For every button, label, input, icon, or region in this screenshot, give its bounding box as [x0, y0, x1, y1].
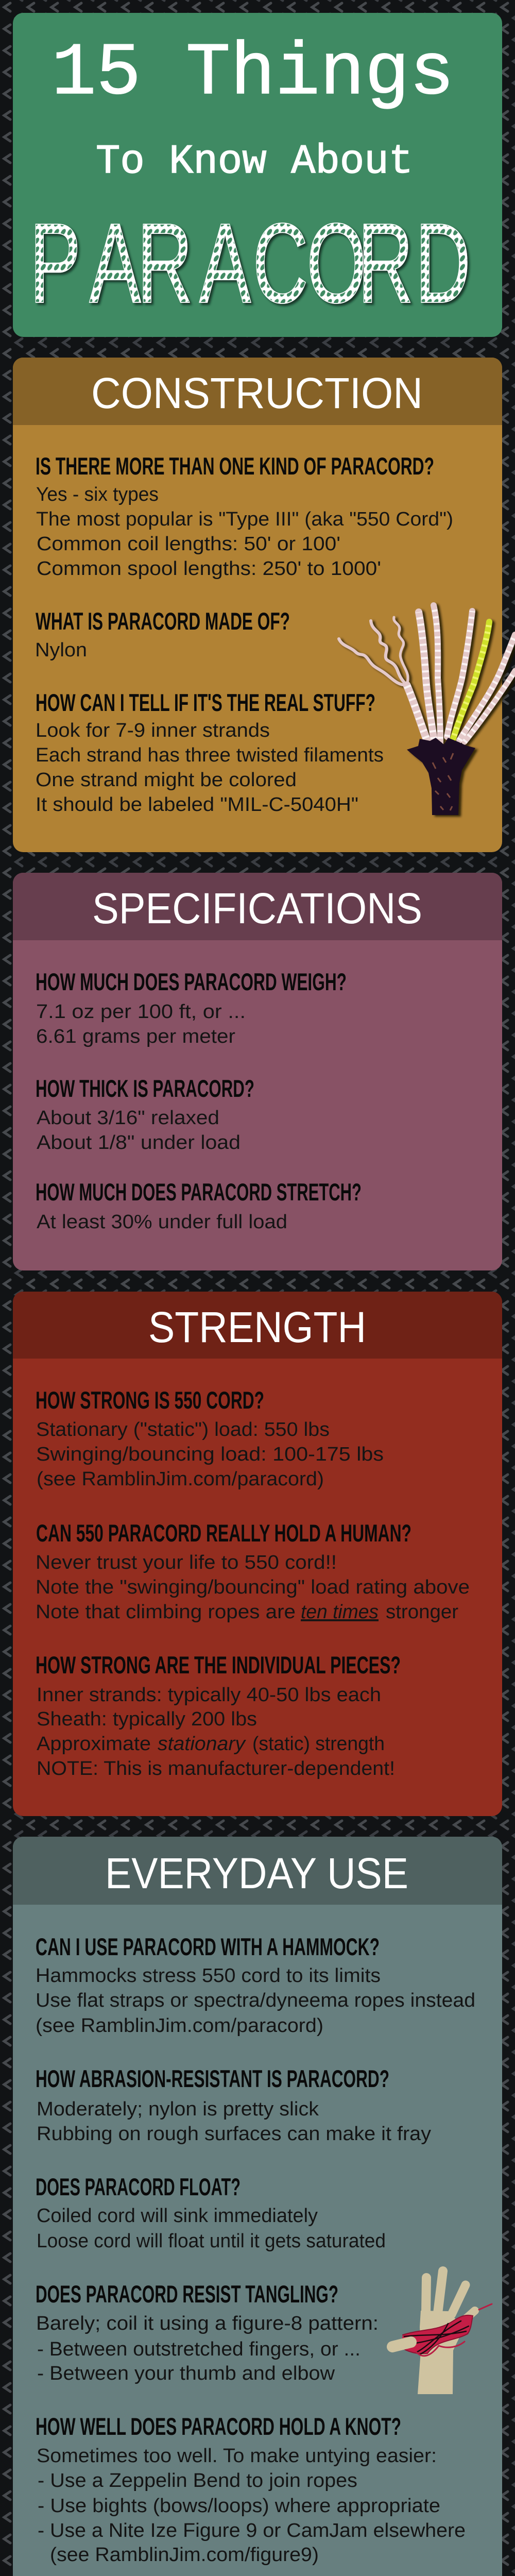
- question: what it is made of: [35, 607, 290, 661]
- question: stretch: [36, 1178, 362, 1233]
- question: how strong: (see RamblinJim.com/paracord): [37, 1468, 324, 1490]
- question: abrasion: Rubbing on rough surfaces can make it fray: [37, 2123, 431, 2145]
- question: weight: [36, 968, 347, 1047]
- question: real stuff: Each strand has three twisted filaments: [36, 744, 384, 766]
- question: thickness: HOW THICK IS PARACORD?: [36, 1075, 254, 1102]
- question: kinds of paracord: Yes - six types: [36, 484, 159, 505]
- question: hammock: [36, 1933, 475, 2037]
- question: tangling: DOES PARACORD RESIST TANGLING?: [36, 2280, 338, 2308]
- question: kinds of paracord: The most popular is "Type III" (aka "550 Cord"): [36, 509, 453, 530]
- question: real stuff: [36, 689, 384, 816]
- panel: strength: [13, 1292, 502, 1816]
- question: individual pieces: (static) strength: [252, 1733, 385, 1755]
- question: how strong: HOW STRONG IS 550 CORD?: [36, 1386, 264, 1414]
- panel: specifications: [13, 873, 502, 1270]
- question: float: [36, 2173, 386, 2252]
- question: how strong: Stationary ("static") load: 550 lbs: [36, 1419, 330, 1440]
- heading: strength: STRENGTH: [148, 1303, 366, 1351]
- question: thickness: About 1/8" under load: [37, 1132, 241, 1154]
- panel: everyday use: [13, 1837, 502, 2576]
- question: real stuff: One strand might be colored: [36, 769, 297, 791]
- question: hold a knot: [36, 2413, 466, 2566]
- question: hold a knot: - Use a Nite Ize Figure 9 or CamJam elsewhere: [38, 2520, 466, 2541]
- question: hold a knot: - Use bights (bows/loops) where appropriate: [38, 2495, 440, 2517]
- question: what it is made of: Nylon: [35, 639, 87, 661]
- heading: rope lettering PARACORD: PARACORD: [30, 200, 471, 326]
- panel: construction: [13, 358, 515, 852]
- question: hammock: Use flat straps or spectra/dyneema ropes instead: [36, 1990, 475, 2011]
- question: abrasion: [36, 2065, 431, 2145]
- question: individual pieces: Approximate: [37, 1733, 151, 1755]
- question: hold a knot: (see RamblinJim.com/figure9): [50, 2544, 319, 2566]
- heading: specifications: SPECIFICATIONS: [92, 884, 422, 933]
- question: abrasion: Moderately; nylon is pretty slick: [37, 2098, 319, 2120]
- question: thickness: About 3/16" relaxed: [37, 1107, 219, 1129]
- question: hold a human: Note the "swinging/bouncing" load rating above: [36, 1577, 470, 1598]
- question: hammock: (see RamblinJim.com/paracord): [36, 2015, 323, 2037]
- question: tangling: - Between your thumb and elbow: [37, 2363, 335, 2384]
- icon: hand with figure-8 coil of red cord: [392, 2271, 492, 2394]
- heading: 15 Things: 15 Things: [52, 32, 454, 116]
- question: tangling: - Between outstretched fingers, or ...: [37, 2338, 360, 2360]
- question: kinds of paracord: Common coil lengths: 50' or 100': [37, 533, 340, 555]
- question: hold a human: Note that climbing ropes are: [36, 1601, 296, 1623]
- icon: frayed paracord with inner strands: [339, 605, 515, 815]
- question: real stuff: It should be labeled "MIL-C-5040H": [36, 794, 358, 816]
- subheading: To Know About: To Know About: [96, 139, 413, 185]
- question: weight: 6.61 grams per meter: [36, 1026, 235, 1047]
- question: tangling: Barely; coil it using a figure-8 pattern:: [36, 2313, 379, 2334]
- question: thickness: [36, 1075, 254, 1154]
- heading: everyday use: EVERYDAY USE: [105, 1849, 408, 1897]
- question: kinds of paracord: Common spool lengths: 250' to 1000': [37, 558, 381, 580]
- question: real stuff: Look for 7-9 inner strands: [36, 720, 270, 741]
- question: individual pieces: stationary: [158, 1733, 246, 1755]
- question: float: Loose cord will float until it gets saturated: [37, 2230, 386, 2252]
- question: float: DOES PARACORD FLOAT?: [36, 2173, 241, 2200]
- question: hold a human: Never trust your life to 550 cord!!: [36, 1552, 337, 1573]
- question: individual pieces: Sheath: typically 200 lbs: [37, 1708, 257, 1730]
- question: stretch: At least 30% under full load: [37, 1211, 287, 1233]
- question: weight: 7.1 oz per 100 ft, or ...: [36, 1001, 246, 1023]
- question: individual pieces: NOTE: This is manufacturer-dependent!: [37, 1758, 395, 1780]
- question: how strong: [36, 1386, 384, 1490]
- question: individual pieces: Inner strands: typically 40-50 lbs each: [37, 1684, 381, 1706]
- question: individual pieces: [36, 1651, 401, 1780]
- question: how strong: Swinging/bouncing load: 100-175 lbs: [36, 1444, 384, 1465]
- question: weight: HOW MUCH DOES PARACORD WEIGH?: [36, 968, 347, 995]
- question: tangling: [36, 2280, 379, 2384]
- question: hold a knot: Sometimes too well. To make untying easier:: [37, 2445, 437, 2467]
- question: hold a human: stronger: [386, 1601, 458, 1623]
- heading: construction: CONSTRUCTION: [91, 369, 423, 417]
- question: what it is made of: WHAT IS PARACORD MADE OF?: [36, 607, 290, 635]
- question: hold a knot: - Use a Zeppelin Bend to join ropes: [38, 2470, 357, 2492]
- question: float: Coiled cord will sink immediately: [37, 2205, 318, 2227]
- question: hold a human: ten times: [301, 1601, 379, 1623]
- question: hold a human: [36, 1519, 470, 1623]
- panel: title: [13, 13, 502, 337]
- question: kinds of paracord: [36, 452, 453, 580]
- question: hammock: Hammocks stress 550 cord to its limits: [36, 1965, 381, 1987]
